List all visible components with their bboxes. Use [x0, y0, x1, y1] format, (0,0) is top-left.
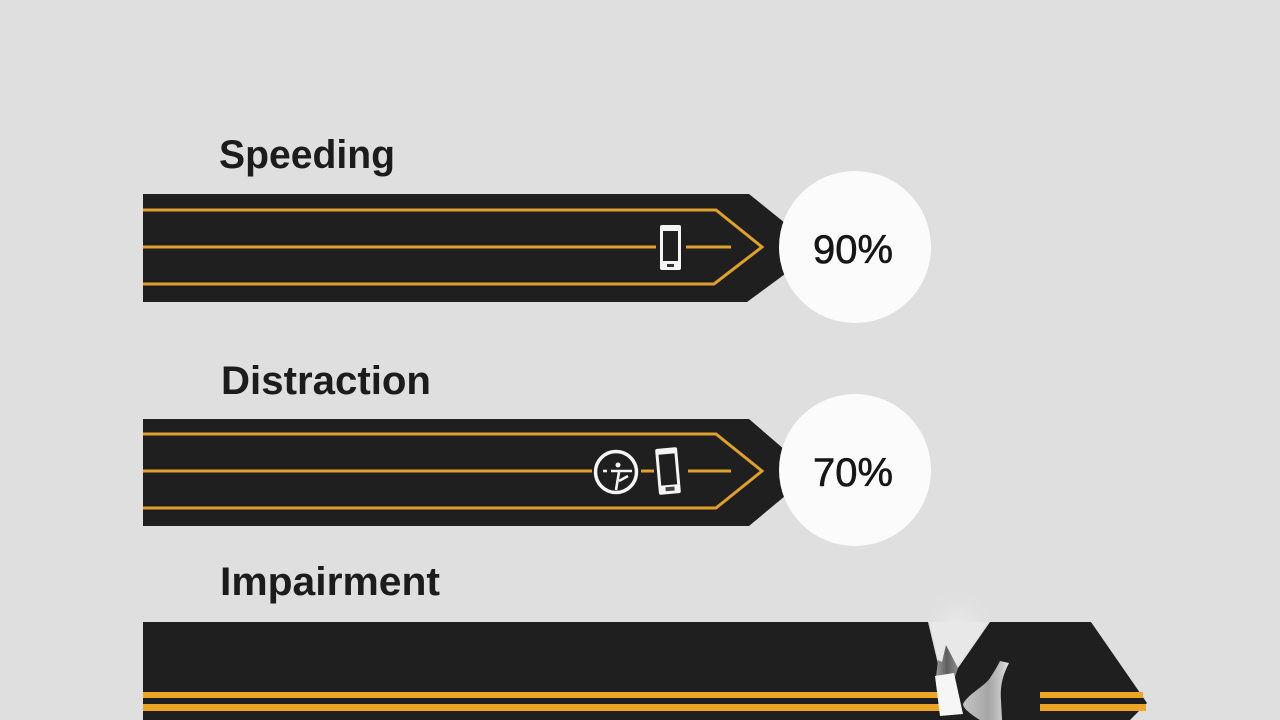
road lines: speeding: [143, 210, 762, 284]
panel: impairment: [143, 560, 1147, 720]
arrow bar: speeding: [143, 194, 785, 302]
badge: 70%: [779, 394, 931, 546]
badge: 70%: 70%: [813, 451, 893, 495]
panel: speeding: [143, 133, 931, 323]
haze in the notch: [930, 622, 988, 666]
arrow bar: distraction: [143, 419, 785, 526]
icon: broken bottle: [935, 645, 963, 716]
heading: distraction: Distraction: [221, 359, 431, 403]
icon: tilted phone: [655, 447, 681, 495]
icon: phone: [660, 225, 681, 270]
badge: 90%: 90%: [813, 228, 893, 272]
heading: impairment: Impairment: [220, 560, 440, 604]
heading: speeding: Speeding: [219, 133, 395, 177]
icon: steering wheel: [596, 452, 636, 492]
badge: 90%: [779, 171, 931, 323]
panel: distraction: [143, 359, 931, 546]
arrow bar: impairment: [143, 622, 1147, 720]
smoke above the bar: [920, 575, 996, 675]
road lines: impairment: [143, 692, 1146, 711]
road lines: distraction: [143, 434, 762, 508]
icon: flask bottle: [963, 661, 1009, 720]
